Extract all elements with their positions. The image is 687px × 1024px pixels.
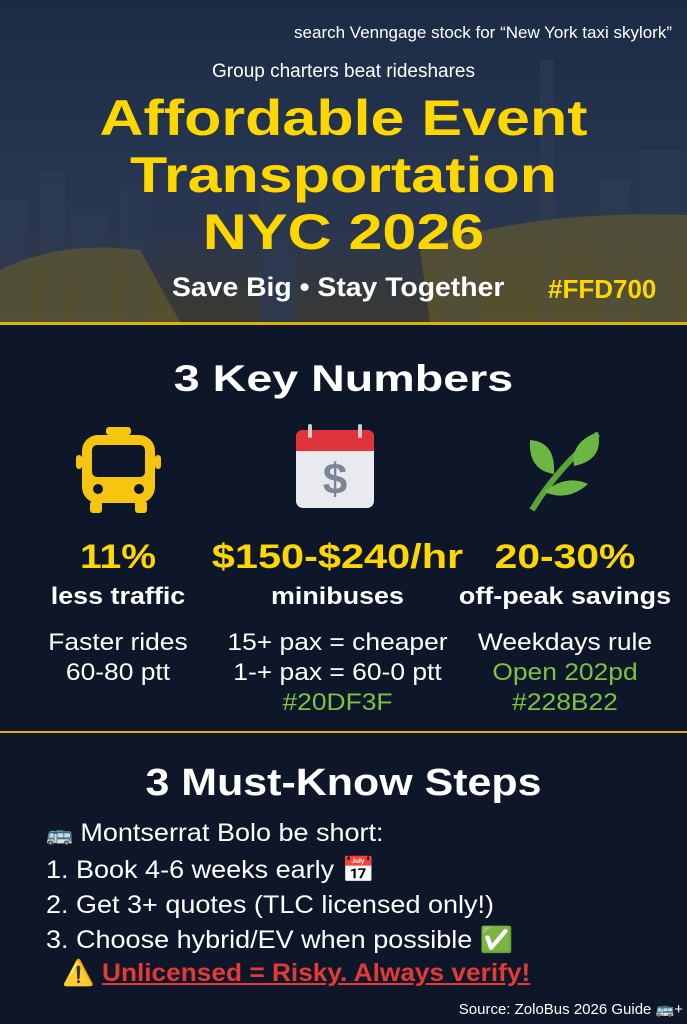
title: Transportation [130,147,557,203]
stat: minibuses: 15+ pax = cheaper [227,629,448,656]
stat: off-peak: off-peak savings [459,583,671,610]
heading: 3 Key Numbers: 3 Key Numbers [174,358,513,399]
stat: off-peak: 20-30% [495,538,635,576]
title: Affordable Event [99,90,588,146]
stat: traffic: Faster rides [48,629,188,656]
icon: calendar dollar: $ [323,455,347,504]
steps list: 2. Get 3+ quotes (TLC licensed only!) [46,891,494,919]
stat: off-peak: #228B22 [512,689,618,716]
icon: calendar dollar [296,424,374,508]
source: Source: ZoloBus 2026 Guide 🚌+ [459,1001,683,1018]
tagline: Save Big • Stay Together [172,272,504,302]
subtitle: Group charters beat rideshares [212,61,475,82]
stat: traffic: less traffic [51,583,185,610]
color code tag: #FFD700 [548,274,656,304]
steps list: 1. Book 4-6 weeks early 📅 [46,856,375,884]
stat: minibuses [212,538,463,716]
header caption: search Venngage stock for “New York taxi skylork” [294,23,672,42]
stat: off-peak [459,538,671,716]
warning callout: ⚠️ Unlicensed = Risky. Always verify! [62,959,530,987]
stat: off-peak: Weekdays rule [478,629,652,656]
header: skyline banner [0,0,687,322]
stat: off-peak: Open 202pd [492,659,638,686]
steps list: 3. Choose hybrid/EV when possible ✅ [46,926,513,954]
stat: traffic: 11% [80,538,156,576]
panel: key numbers [48,424,671,716]
stat: minibuses: #20DF3F [282,689,393,716]
stat: minibuses: minibuses [271,583,404,610]
title: NYC 2026 [203,204,484,260]
steps list [46,819,513,954]
heading: 3 Must-Know Steps: 3 Must-Know Steps [145,762,542,804]
icon: bus [76,427,161,513]
stat: minibuses: 1-+ pax = 60-0 ptt [233,659,442,686]
stat: minibuses: $150-$240/hr [212,538,463,576]
stat: traffic: 60-80 ptt [66,659,170,686]
steps list: 🚌 Montserrat Bolo be short: [46,819,384,847]
stat: traffic [48,538,188,686]
icon: leaf [530,432,600,512]
title [99,90,588,260]
